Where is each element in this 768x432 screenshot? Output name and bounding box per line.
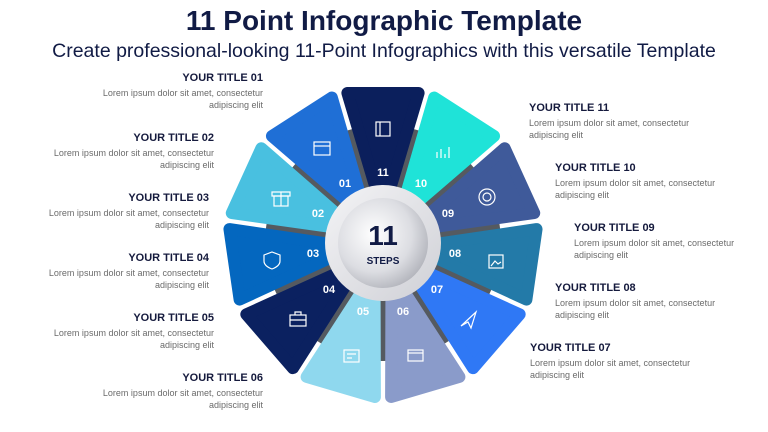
text: title 01: YOUR TITLE 01 [182, 72, 263, 84]
text: title 03: adipiscing elit [155, 220, 209, 230]
text: title 10: Lorem ipsum dolor sit amet, consectetur [555, 178, 715, 188]
segment 05 [307, 262, 409, 397]
numbers: 05 [357, 306, 369, 318]
text: title 02: adipiscing elit [160, 160, 214, 170]
text: title 05: adipiscing elit [160, 340, 214, 350]
numbers: 04 [323, 284, 336, 296]
segment 03 [229, 212, 358, 300]
numbers [307, 167, 461, 318]
numbers: 10 [415, 178, 427, 190]
numbers: 07 [431, 284, 443, 296]
text: title 04: Lorem ipsum dolor sit amet, consectetur [49, 268, 209, 278]
segment 04 [246, 236, 383, 368]
text: title 11 [529, 102, 689, 140]
text: title 10: adipiscing elit [555, 190, 609, 200]
text: title 01: Lorem ipsum dolor sit amet, consectetur [103, 88, 263, 98]
text: title 09: Lorem ipsum dolor sit amet, consectetur [574, 238, 734, 248]
text: title 08: adipiscing elit [555, 310, 609, 320]
text: title 07 [530, 342, 690, 380]
text: title 02 [54, 132, 214, 170]
segment 11 [347, 93, 419, 213]
text: title 06: YOUR TITLE 06 [182, 372, 263, 384]
center badge [325, 185, 441, 301]
text: title 07: Lorem ipsum dolor sit amet, consectetur [530, 358, 690, 368]
text: title 05 [54, 312, 214, 350]
text: title 01: adipiscing elit [209, 100, 263, 110]
text: title 02: YOUR TITLE 02 [133, 132, 214, 144]
text: title 11: YOUR TITLE 11 [529, 102, 609, 114]
subtitle: Create professional-looking 11-Point Infographics with this versatile Template [52, 40, 716, 62]
text: title 08 [555, 282, 715, 320]
text: title 08: Lorem ipsum dolor sit amet, consectetur [555, 298, 715, 308]
numbers: 08 [449, 248, 461, 260]
numbers: 02 [312, 208, 324, 220]
text: title 06 [103, 372, 263, 410]
segment 09 [396, 148, 534, 263]
text: title 03: Lorem ipsum dolor sit amet, consectetur [49, 208, 209, 218]
center badge: STEPS [367, 256, 400, 267]
numbers: 09 [442, 208, 454, 220]
text: title 08: YOUR TITLE 08 [555, 282, 636, 294]
center badge: 11 [368, 220, 398, 251]
title: 11 Point Infographic Template [186, 5, 582, 36]
text: title 03: YOUR TITLE 03 [128, 192, 209, 204]
numbers: 03 [307, 248, 319, 260]
text: title 10 [555, 162, 715, 200]
icons [264, 122, 503, 362]
text: title 05: YOUR TITLE 05 [133, 312, 214, 324]
text: title 06: adipiscing elit [209, 400, 263, 410]
segment 01 [272, 98, 397, 237]
segment 10 [369, 98, 494, 237]
text: title 09: adipiscing elit [574, 250, 628, 260]
numbers: 11 [377, 167, 389, 179]
text: title 02: Lorem ipsum dolor sit amet, consectetur [54, 148, 214, 158]
text: title 10: YOUR TITLE 10 [555, 162, 636, 174]
numbers: 01 [339, 178, 351, 190]
text: title 07: YOUR TITLE 07 [530, 342, 611, 354]
numbers: 06 [397, 306, 409, 318]
text: title 01 [103, 72, 263, 110]
text: title 05: Lorem ipsum dolor sit amet, consectetur [54, 328, 214, 338]
text: title 07: adipiscing elit [530, 370, 584, 380]
text: title 11: Lorem ipsum dolor sit amet, consectetur [529, 118, 689, 128]
text: title 04: YOUR TITLE 04 [128, 252, 209, 264]
text: title 09: YOUR TITLE 09 [574, 222, 655, 234]
text: title 09 [574, 222, 734, 260]
text: title 11: adipiscing elit [529, 130, 583, 140]
segment 07 [383, 236, 520, 368]
text: title 06: Lorem ipsum dolor sit amet, consectetur [103, 388, 263, 398]
segment 08 [408, 212, 537, 300]
text: title 04 [49, 252, 209, 290]
text: title 03 [49, 192, 209, 230]
segment 02 [232, 148, 370, 263]
segment 06 [357, 262, 459, 397]
text: title 04: adipiscing elit [155, 280, 209, 290]
